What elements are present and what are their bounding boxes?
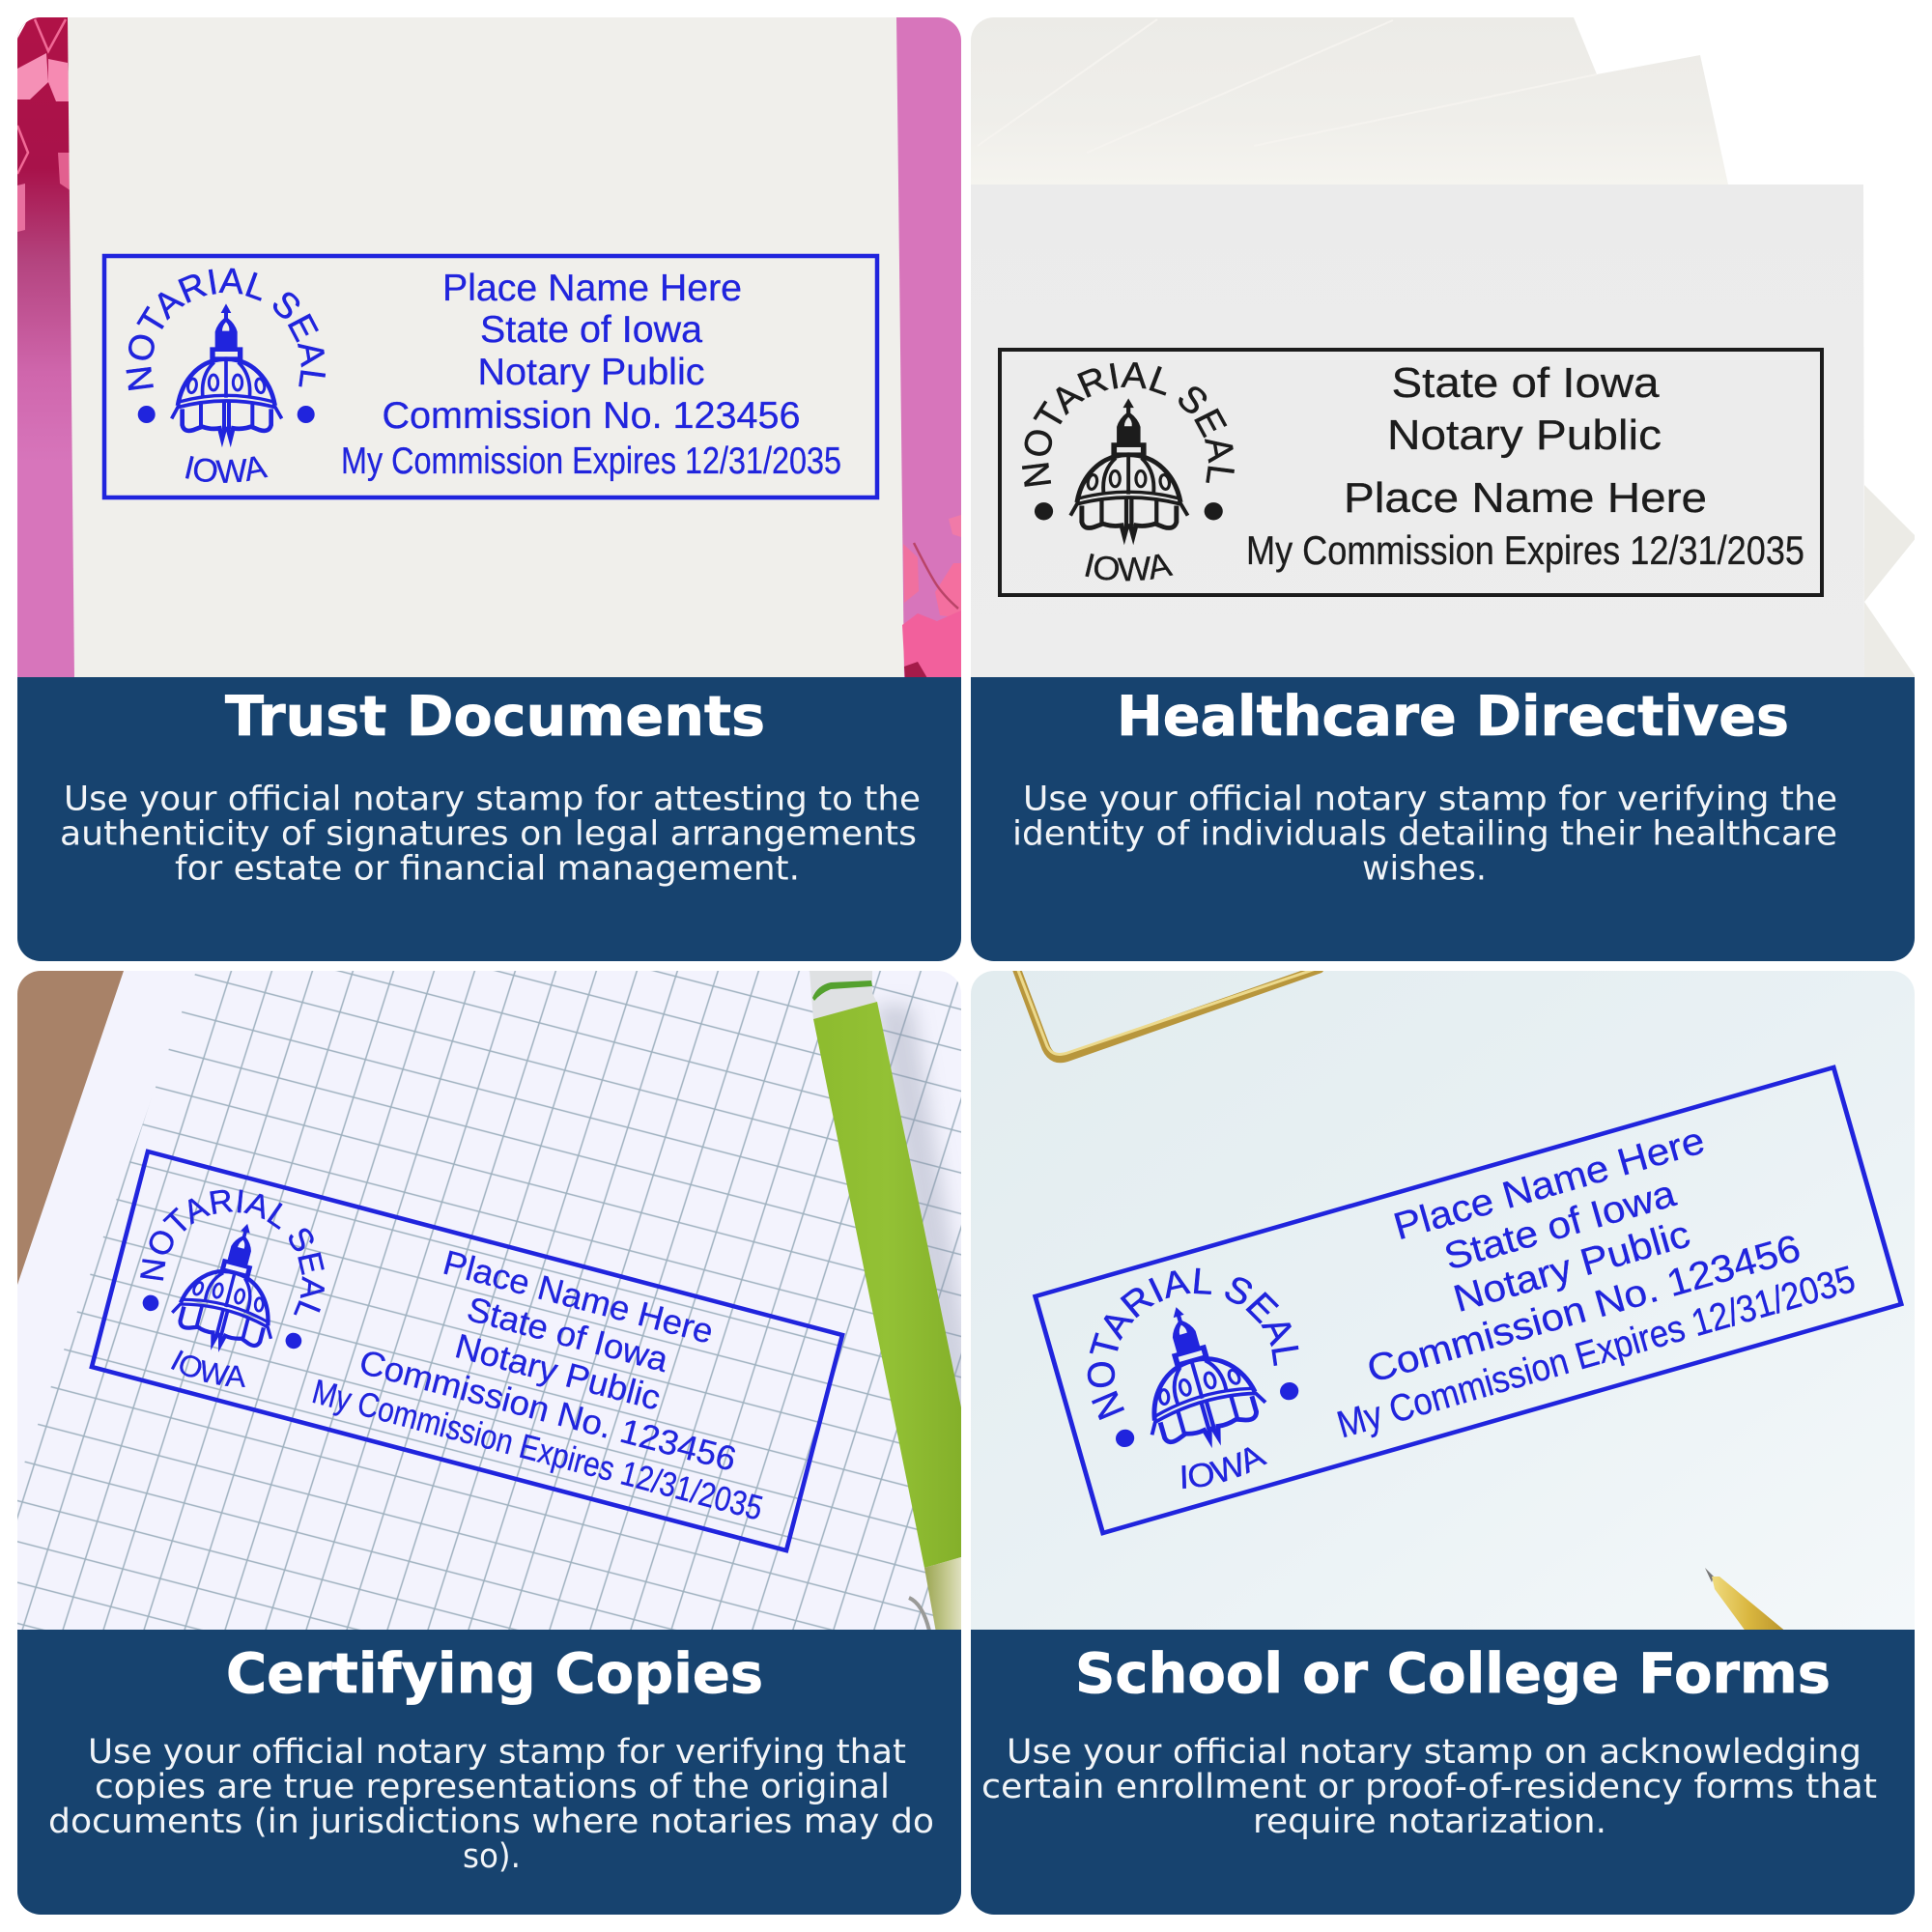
icon: capitol dome <box>171 1224 272 1352</box>
panel: certifying copies <box>17 971 961 1915</box>
stamp text lines <box>341 268 841 482</box>
stamp impression: blue rectangular <box>102 253 879 500</box>
stamp text lines: Place Name Here <box>442 268 742 309</box>
caption band <box>17 1630 961 1915</box>
stamp text lines: Place Name Here <box>440 1242 718 1351</box>
flower: bottom right <box>902 515 961 678</box>
stamp text lines: State of Iowa <box>480 309 702 351</box>
description: healthcare directives: wishes. <box>1362 850 1487 889</box>
seal: NOTARIAL SEAL <box>1088 1267 1298 1420</box>
icon: capitol dome <box>172 303 282 439</box>
graph paper grid <box>17 971 961 1633</box>
seal <box>126 269 327 483</box>
seal <box>140 1190 325 1387</box>
paper sheets behind <box>971 17 1917 678</box>
stamp text lines: Notary Public <box>477 352 705 393</box>
description: healthcare directives: identity of individuals detailing their healthcare <box>1012 815 1837 854</box>
seal: NOTARIAL SEAL <box>140 1190 325 1316</box>
description: certifying copies: copies are true representations of the original <box>95 1768 890 1806</box>
pen shadow <box>877 997 961 1406</box>
description: trust documents: authenticity of signatures on legal arrangements <box>60 815 917 854</box>
icon: gold clip <box>1016 968 1320 1059</box>
stamp text lines: Place Name Here <box>1344 474 1707 522</box>
stamp text lines: Commission No. 123456 <box>1362 1226 1805 1391</box>
flower: top left <box>17 17 71 413</box>
description: trust documents: Use your official notary stamp for attesting to the <box>64 781 921 819</box>
description: healthcare directives: Use your official notary stamp for verifying the <box>1023 781 1837 819</box>
description: school or college forms: require notarization. <box>1253 1803 1606 1841</box>
description: certifying copies <box>48 1733 934 1876</box>
stamp text lines: State of Iowa <box>1439 1171 1681 1278</box>
seal: NOTARIAL SEAL <box>126 269 327 390</box>
stamp text lines <box>1246 359 1804 573</box>
stamp text lines: State of Iowa <box>1391 359 1660 407</box>
stamp text lines: My Commission Expires 12/31/2035 <box>308 1371 767 1528</box>
seal <box>1088 1267 1298 1490</box>
caption band <box>971 677 1915 961</box>
seal: IOWA <box>1085 554 1173 582</box>
seal <box>1022 362 1235 582</box>
description: school or college forms: certain enrollment or proof-of-residency forms that <box>981 1768 1877 1806</box>
icon: green pen <box>810 971 961 1633</box>
heading: certifying copies: Certifying Copies <box>226 1642 763 1706</box>
stamp text lines: Notary Public <box>1449 1211 1694 1321</box>
seal: IOWA <box>1182 1447 1267 1490</box>
heading: trust documents: Trust Documents <box>225 685 765 749</box>
heading: school or college forms: School or College Forms <box>1075 1642 1831 1706</box>
stamp text lines: Commission No. 123456 <box>383 395 800 437</box>
description: certifying copies: so). <box>463 1837 521 1876</box>
photo background: pink surface <box>17 17 961 684</box>
stamp text lines: State of Iowa <box>463 1289 672 1379</box>
description: certifying copies: Use your official notary stamp for verifying that <box>88 1733 906 1772</box>
seal: IOWA <box>170 1350 245 1387</box>
panel: trust documents <box>17 17 961 961</box>
icon: capitol dome <box>1150 1307 1267 1448</box>
description: trust documents <box>60 781 921 889</box>
caption band <box>971 1630 1915 1915</box>
stamp impression: black rectangular <box>998 348 1824 597</box>
panel: school or college forms <box>971 971 1915 1915</box>
description: certifying copies: documents (in jurisdictions where notaries may do <box>48 1803 934 1841</box>
stamp text lines: Place Name Here <box>1389 1119 1709 1248</box>
description: healthcare directives <box>1015 784 1835 880</box>
kraft surface corner <box>17 971 124 1285</box>
caption band <box>17 677 961 961</box>
seal: NOTARIAL SEAL <box>1022 362 1235 487</box>
stamp impression: blue tilted <box>1032 1065 1904 1536</box>
stamp text lines: Commission No. 123456 <box>355 1342 740 1479</box>
icon: gold pen tip <box>1705 1568 1787 1633</box>
paper sheet front <box>971 185 1864 678</box>
description: school or college forms: Use your official notary stamp on acknowledging <box>1007 1733 1861 1772</box>
stamp text lines <box>1284 1089 1860 1446</box>
description: trust documents: for estate or financial management. <box>175 850 800 889</box>
stamp text lines: My Commission Expires 12/31/2035 <box>1246 527 1804 573</box>
panel: healthcare directives <box>971 17 1915 961</box>
heading: healthcare directives: Healthcare Directives <box>1117 685 1789 749</box>
stamp text lines: Notary Public <box>1387 412 1662 459</box>
icon: capitol dome <box>1070 398 1188 536</box>
seal: IOWA <box>185 456 269 483</box>
paper sheet <box>68 17 904 678</box>
stamp text lines: My Commission Expires 12/31/2035 <box>341 440 841 482</box>
stamp text lines: Notary Public <box>451 1325 665 1418</box>
stamp text lines <box>313 1250 763 1519</box>
stamp impression: blue tilted <box>89 1149 845 1553</box>
description: school or college forms <box>981 1733 1877 1841</box>
